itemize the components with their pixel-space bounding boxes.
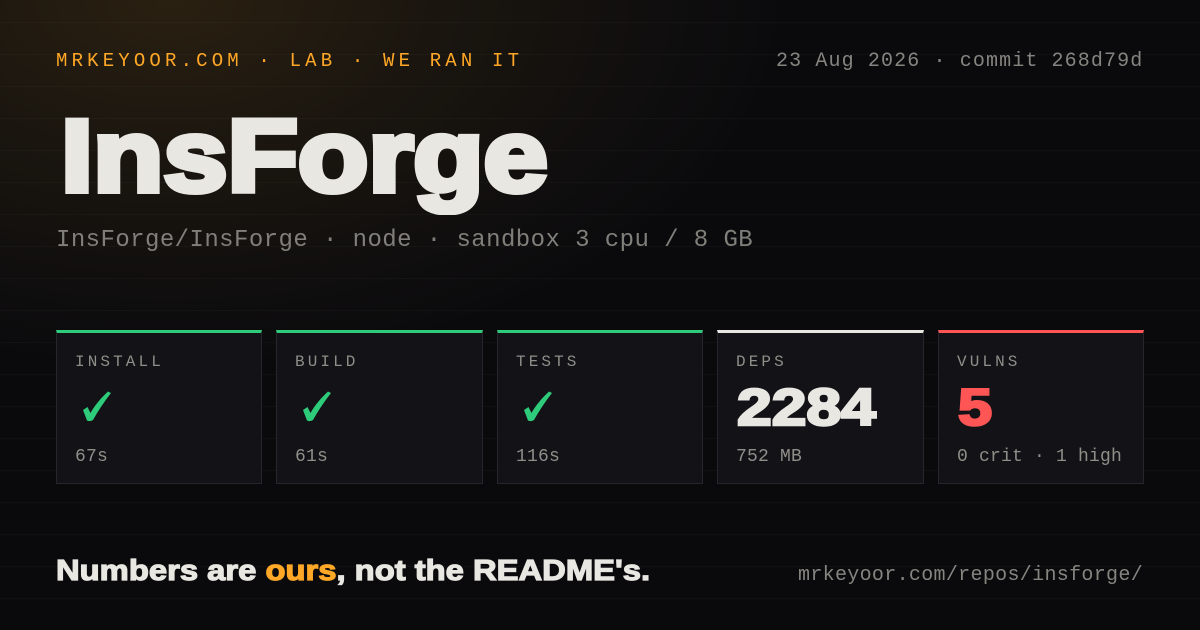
icon: tests check [524, 392, 552, 422]
tests time: 116s [516, 447, 560, 467]
panel: deps [717, 330, 924, 484]
eyebrow label: MRKEYOOR.COM · LAB · WE RAN IT [56, 50, 523, 72]
subtitle: InsForge/InsForge · node · sandbox 3 cpu / 8 GB [56, 227, 753, 254]
panel: vulns [938, 330, 1144, 484]
title: InsForge [61, 98, 548, 212]
vulns count: 5 [958, 379, 992, 437]
deps size: 752 MB [736, 447, 802, 467]
vulns label: VULNS [957, 353, 1021, 371]
build time: 61s [295, 447, 328, 467]
footer url: mrkeyoor.com/repos/insforge/ [798, 564, 1143, 587]
date and commit: 23 Aug 2026 · commit 268d79d [776, 50, 1143, 73]
tests label: TESTS [516, 353, 580, 371]
icon: build check [303, 392, 331, 422]
vulns severity: 0 crit · 1 high [957, 447, 1122, 467]
icon: install check [83, 392, 111, 422]
deps count: 2284 [737, 379, 876, 437]
panel: tests [497, 330, 703, 484]
build label: BUILD [295, 353, 359, 371]
footer tagline: Numbers are ours, not the README's. [56, 555, 650, 587]
install time: 67s [75, 447, 108, 467]
panel: install [56, 330, 262, 484]
install label: INSTALL [75, 353, 164, 371]
panel: build [276, 330, 483, 484]
deps label: DEPS [736, 353, 787, 371]
